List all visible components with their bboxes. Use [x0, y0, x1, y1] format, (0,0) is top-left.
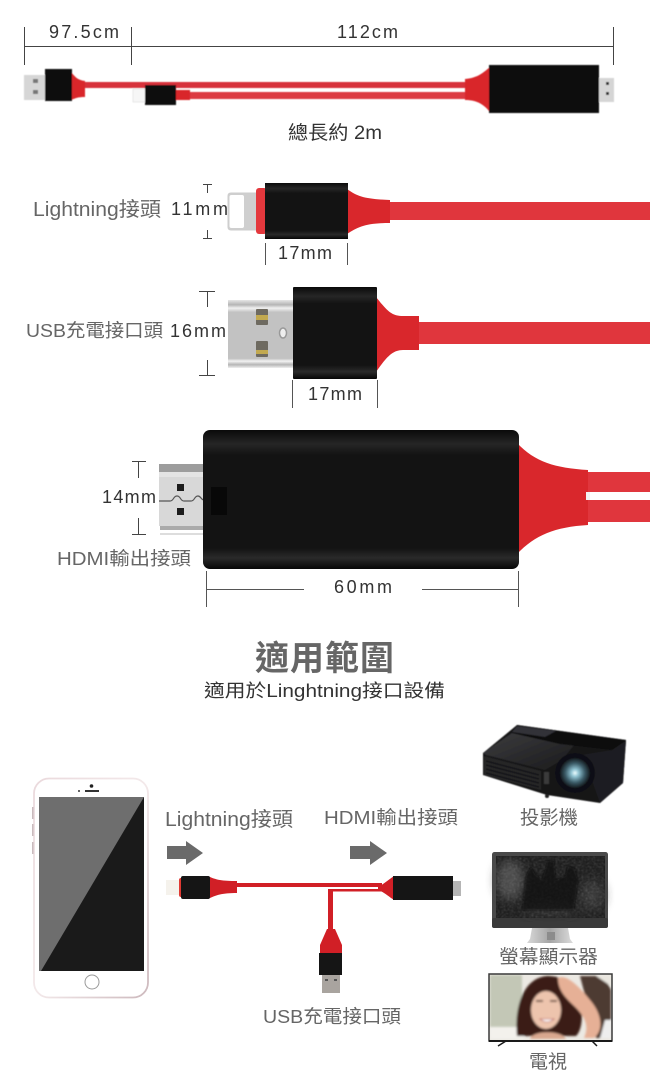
caption: total length: 總長約 2m [288, 122, 382, 144]
heading: Lightning connector: Lightning接頭 [33, 198, 161, 221]
title: 適用範圍 [255, 640, 395, 678]
dimension: 97.5cm and 112cm ruler [24, 22, 614, 65]
cable: Lightning connector [228, 183, 650, 239]
label: projector: 投影機 [520, 807, 578, 829]
dimension: 17mm lightning [266, 243, 348, 265]
dimension: 14mm [102, 461, 156, 534]
dimension: 16mm [170, 291, 226, 376]
dimension: 14mm: 14mm [102, 487, 156, 507]
raised arm [558, 977, 600, 1038]
matte top [483, 733, 575, 770]
label: 97.5cm: 97.5cm [49, 22, 119, 42]
dimension: 11mm: 11mm [171, 199, 228, 219]
arrow: Lightning [167, 841, 203, 865]
icon: projector [483, 725, 626, 803]
heading: USB connector: USB充電接口頭 [26, 320, 164, 341]
dimension: 60mm [206, 571, 518, 607]
label: television: 電視 [529, 1051, 567, 1073]
icon: smartphone [32, 778, 148, 998]
lens [555, 753, 595, 793]
front grille [484, 756, 541, 790]
dimension: 17mm USB [292, 380, 378, 408]
label: monitor: 螢幕顯示器 [499, 946, 598, 968]
label: HDMI output connector: HDMI輸出接頭 [324, 807, 459, 828]
glossy top panel [512, 725, 626, 750]
label: Lightning connector: Lightning接頭 [165, 808, 293, 831]
cable cord [388, 202, 650, 220]
dimension: 17mm USB: 17mm [308, 384, 362, 404]
face [531, 991, 561, 1029]
subtitle: 適用於Linghtning接口設備 [204, 681, 445, 701]
dimension: 11mm [171, 184, 228, 238]
dimension: 17mm lightning: 17mm [278, 243, 332, 263]
chest [530, 1032, 566, 1039]
body [483, 725, 626, 803]
cable: USB connector [228, 287, 650, 379]
dimension: 16mm: 16mm [170, 321, 226, 341]
cable: HDMI connector [159, 430, 650, 569]
hair [516, 976, 582, 1036]
icon: television [489, 974, 612, 1046]
label: USB charging connector: USB充電接口頭 [263, 1006, 402, 1027]
cable: three-way adapter [166, 876, 461, 993]
white plug [228, 193, 262, 230]
dimension: 60mm: 60mm [334, 577, 392, 597]
full cable overview [24, 65, 614, 113]
icon: monitor [492, 852, 608, 943]
heading: HDMI connector: HDMI輸出接頭 [57, 548, 192, 569]
label: 112cm: 112cm [337, 22, 398, 42]
arrow: HDMI [350, 841, 387, 865]
